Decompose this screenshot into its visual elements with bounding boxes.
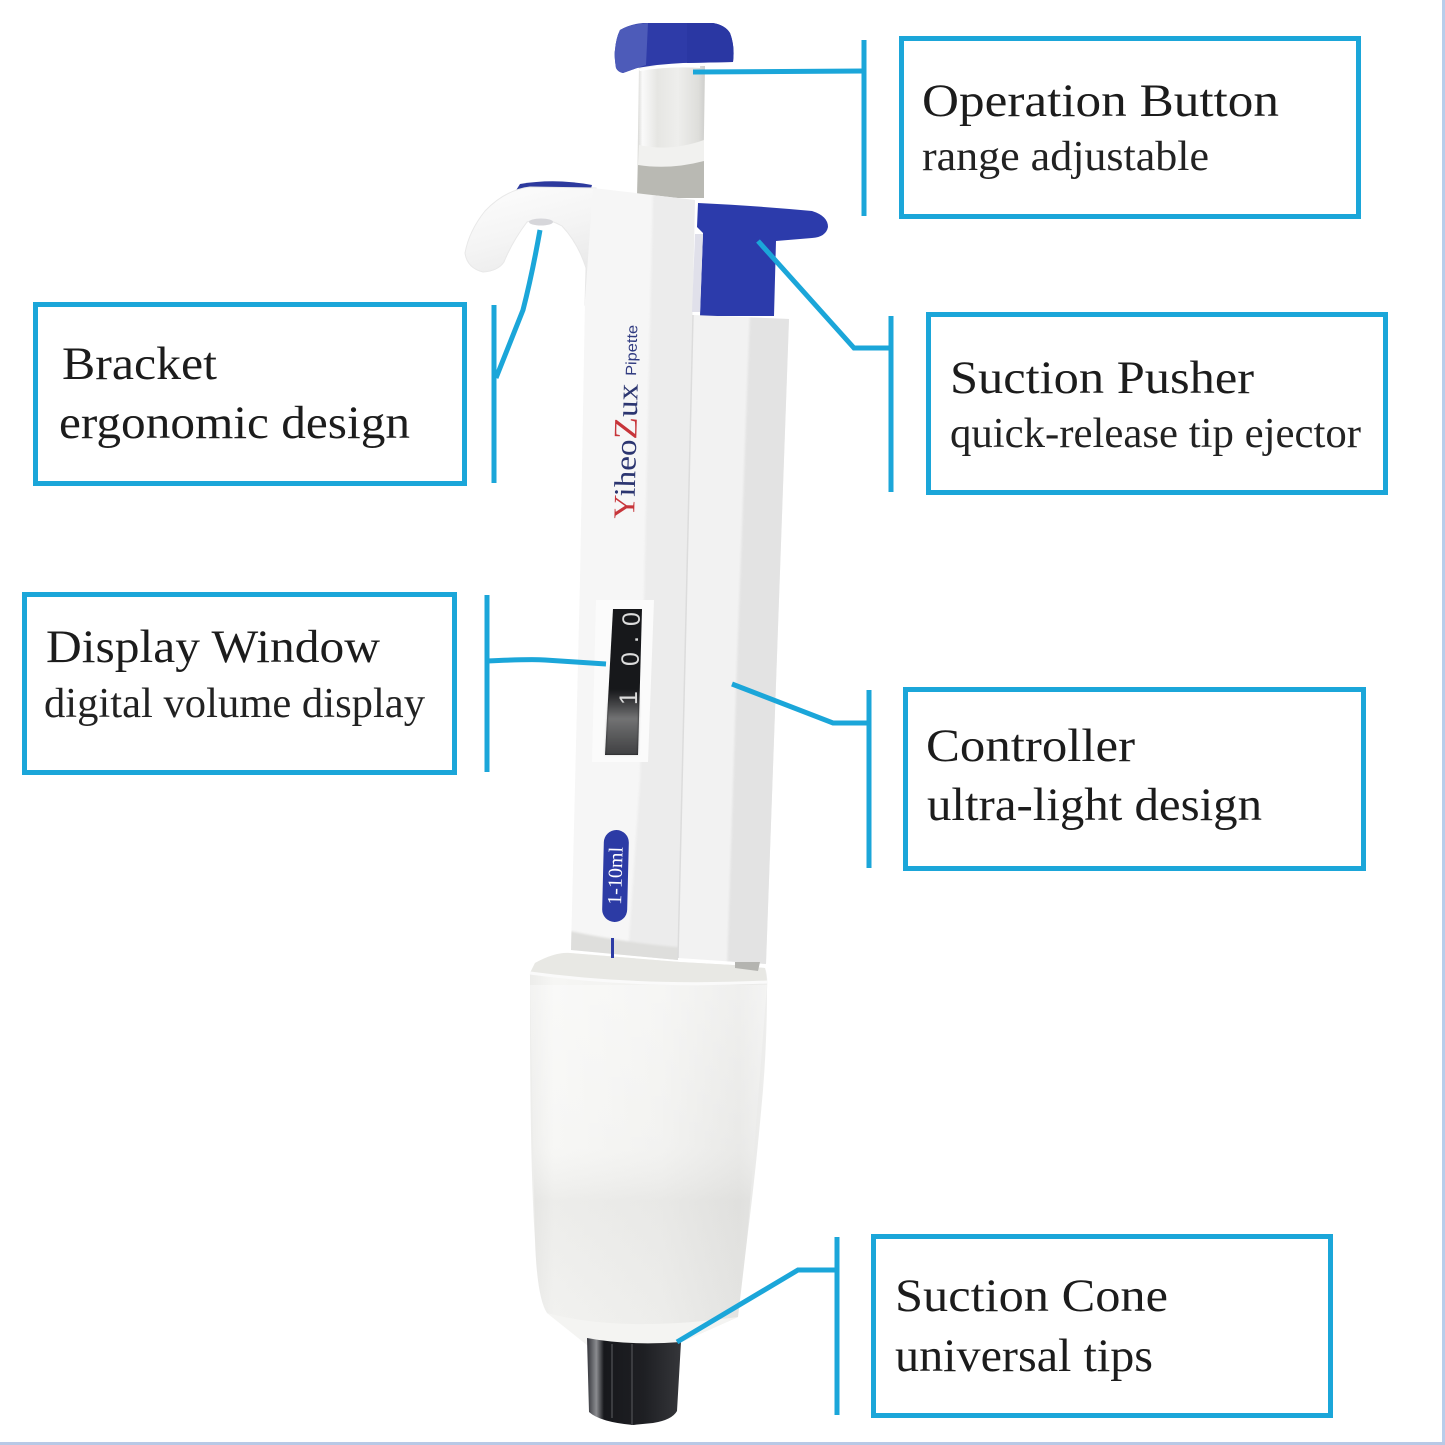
grip lower body <box>530 953 767 1345</box>
suction pusher description: quick-release tip ejector <box>950 411 1361 457</box>
pipette illustration <box>465 23 828 1425</box>
volume badge: 1-10ml <box>604 846 628 905</box>
pipette main body <box>571 188 695 960</box>
panel: controller <box>906 690 1364 868</box>
suction pusher <box>692 203 828 316</box>
volume tick mark <box>611 938 614 958</box>
operation button heading: Operation Button <box>922 75 1279 127</box>
display window <box>592 600 654 762</box>
bracket description: ergonomic design <box>59 397 410 449</box>
display window description: digital volume display <box>44 681 425 727</box>
suction pusher heading: Suction Pusher <box>950 352 1254 404</box>
display window heading: Display Window <box>46 621 380 673</box>
controller description: ultra-light design <box>927 779 1262 831</box>
panel: suction cone <box>874 1236 1330 1416</box>
brand name: YiheoZux <box>606 383 646 519</box>
operation button cap <box>615 23 734 73</box>
bracket heading: Bracket <box>62 338 217 390</box>
hook bracket <box>465 181 596 305</box>
black nozzle tip <box>587 1338 681 1425</box>
operation button description: range adjustable <box>922 134 1209 180</box>
panel: display window <box>24 594 454 772</box>
leader: suction pusher <box>758 241 891 492</box>
leader: bracket <box>494 230 540 483</box>
plunger shaft <box>637 66 705 198</box>
suction cone heading: Suction Cone <box>895 1270 1168 1322</box>
display window: 0 <box>617 652 645 666</box>
leader: display window <box>487 595 606 772</box>
suction cone description: universal tips <box>895 1330 1153 1382</box>
pipette label: Pipette <box>623 325 641 376</box>
controller housing <box>678 312 795 975</box>
panel: bracket <box>36 304 464 484</box>
display window: . <box>616 636 644 643</box>
leader: controller <box>732 684 869 868</box>
leader: suction cone <box>677 1237 837 1415</box>
controller heading: Controller <box>926 720 1135 772</box>
volume badge <box>602 830 629 922</box>
panel: operation button <box>902 38 1358 216</box>
display window: 0 <box>618 612 646 626</box>
panel: suction pusher <box>928 314 1386 492</box>
display window: 1 <box>615 691 643 705</box>
leader: operation button <box>693 40 864 216</box>
